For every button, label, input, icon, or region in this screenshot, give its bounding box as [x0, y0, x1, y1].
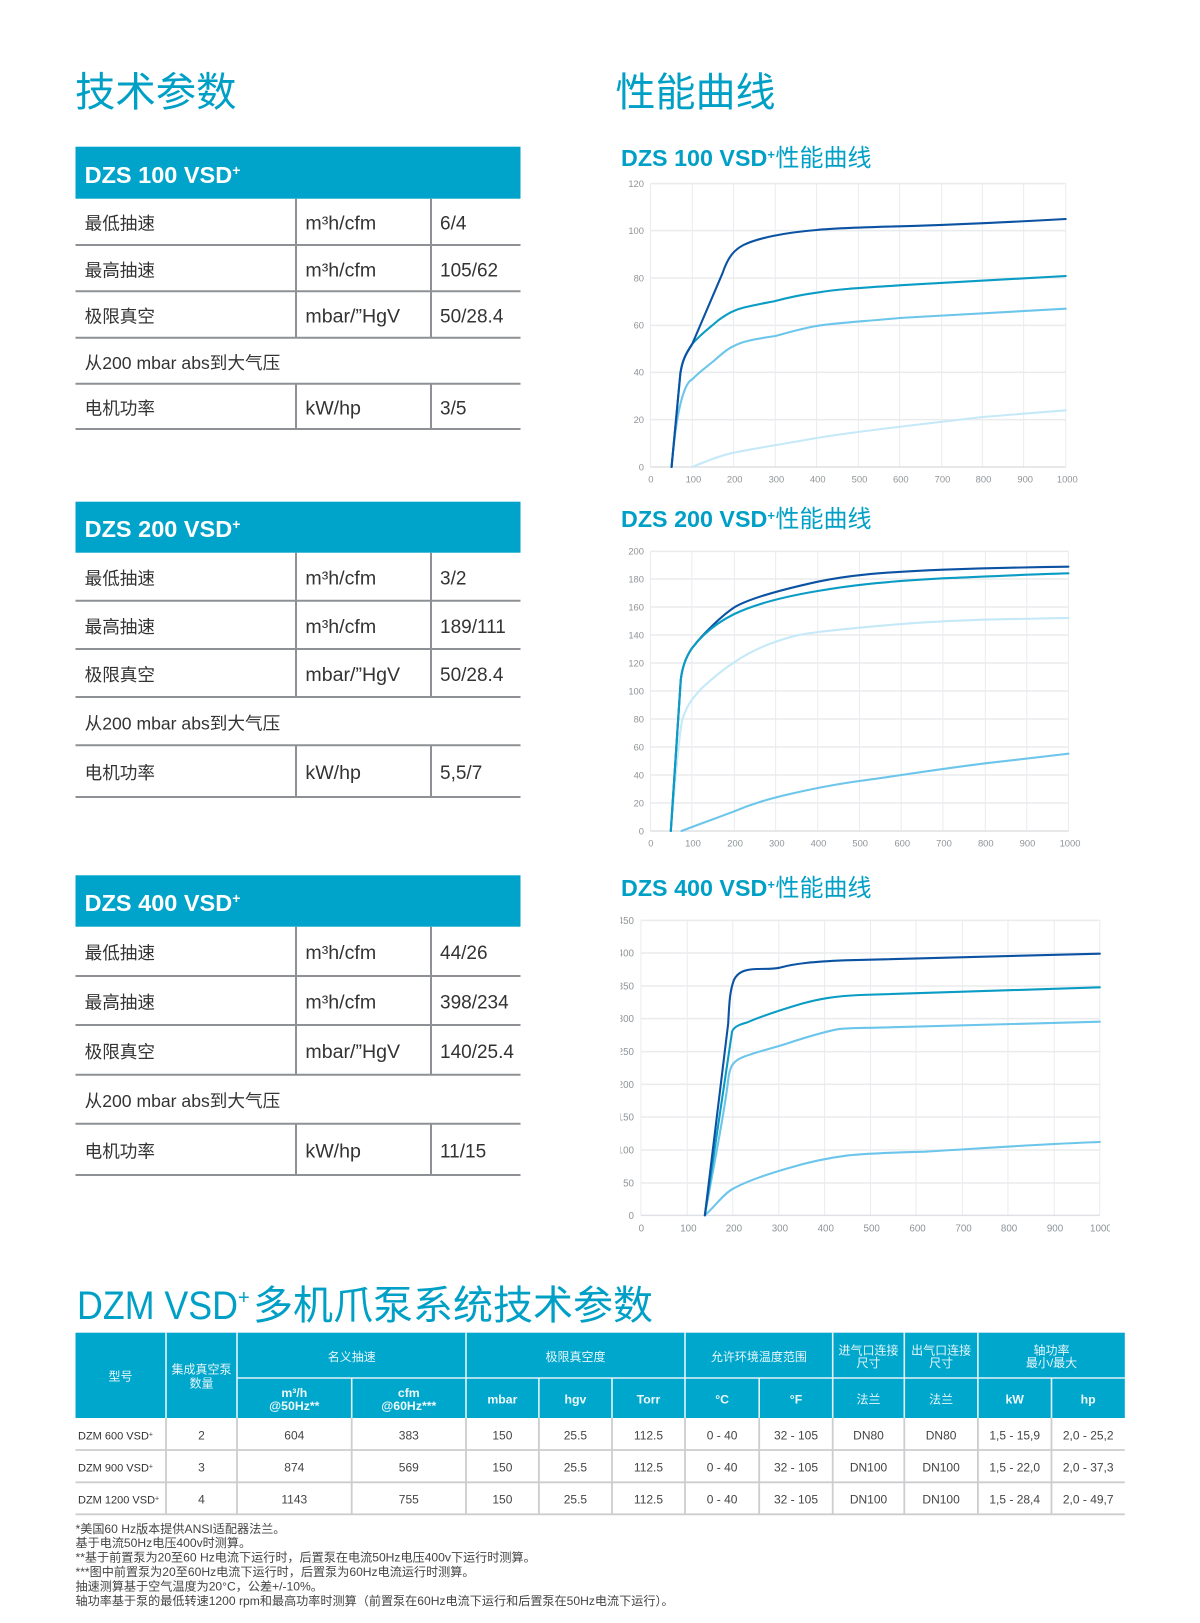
table row: DZM 1200 VSD+: +: [155, 1496, 159, 1502]
title: DZM VSD+ multi-claw pump system parameters: 多机爪泵系统技术参数: [253, 1284, 653, 1328]
table header labels: first row: 轴功率: [1033, 1342, 1070, 1358]
table header labels: first row: 集成真空泵: [171, 1362, 232, 1376]
x axis labels: 700: [935, 474, 950, 484]
spec rows: mbar/”HgV: [305, 306, 400, 328]
table header labels: first row: 进气口连接: [838, 1342, 899, 1358]
table header labels: second row: 法兰: [929, 1392, 953, 1406]
x axis labels: 500: [852, 838, 868, 848]
table row: DZM 600 VSD+: DZM 600 VSD: [78, 1430, 149, 1442]
chart: DZS 200 VSD+ performance curves: [628, 546, 1080, 848]
y axis labels: 250: [618, 1047, 635, 1058]
heading: DZS 400 VSD+ curve: +: [767, 877, 775, 892]
table header: DZS 100 VSD+: +: [232, 162, 240, 178]
spec rows: m³h/cfm: [305, 616, 376, 638]
spec rows: kW/hp: [305, 762, 361, 784]
table row: DZM 900 VSD+: 1,5 - 22,0: [989, 1460, 1040, 1474]
spec rows: 6/4: [440, 214, 467, 234]
table row: DZM 900 VSD+: DZM 900 VSD: [78, 1462, 149, 1474]
table row: DZM 600 VSD+: 32 - 105: [774, 1428, 818, 1442]
title: technical parameters: 技术参数: [75, 69, 237, 115]
table header: DZS 200 VSD+: DZS 200 VSD: [85, 516, 232, 542]
table row: DZM 1200 VSD+: DN100: [850, 1493, 888, 1507]
table header background: [76, 1333, 1125, 1418]
title: DZM VSD+ multi-claw pump system parameters: [77, 1284, 653, 1328]
x axis labels: 1000: [1057, 474, 1078, 484]
x axis labels: 600: [909, 1224, 926, 1234]
y axis labels: 80: [634, 713, 644, 724]
y axis labels: 100: [628, 685, 644, 696]
spec rows: mbar/”HgV: [305, 1041, 400, 1063]
curve: light blue: [705, 1022, 1100, 1215]
table row: DZM 900 VSD+: 874: [284, 1460, 305, 1474]
curve: dark blue: [705, 954, 1100, 1215]
table header: DZS 400 VSD+: +: [232, 890, 240, 906]
spec rows: 44/26: [440, 943, 488, 964]
table header: DZS 400 VSD+: [76, 875, 520, 927]
spec rows: 50/28.4: [440, 306, 504, 328]
x axis labels: 200: [727, 474, 743, 484]
y axis labels: 20: [634, 797, 644, 808]
x axis labels: 500: [864, 1224, 880, 1234]
y axis labels: 0: [629, 1211, 635, 1222]
heading: DZS 200 VSD+ curve: 性能曲线: [776, 506, 872, 533]
table row: DZM 600 VSD+: DN80: [926, 1428, 957, 1442]
x axis labels: 600: [894, 838, 910, 848]
table header labels: second row: °C: [715, 1392, 729, 1406]
table row: DZM 1200 VSD+: 0 - 40: [707, 1493, 738, 1507]
x axis labels: 900: [1047, 1224, 1064, 1234]
table row: DZM 1200 VSD+: 112.5: [634, 1493, 663, 1507]
spec rows: mbar/”HgV: [305, 664, 400, 686]
spec rows: 3/2: [440, 568, 466, 590]
x axis labels: 900: [1020, 838, 1035, 848]
y axis labels: 200: [618, 1080, 635, 1091]
spec rows: 最高抽速: [85, 617, 155, 637]
table row: DZM 1200 VSD+: 4: [198, 1493, 205, 1507]
spec rows: 189/111: [440, 617, 506, 638]
curve: teal: [672, 276, 1066, 467]
table row: DZM 900 VSD+: DN100: [850, 1460, 888, 1474]
y axis labels: 180: [628, 573, 644, 584]
spec rows: 3/5: [440, 398, 466, 420]
x axis labels: [639, 1224, 1110, 1232]
x axis labels: 1000: [1090, 1224, 1112, 1234]
y axis labels: 100: [618, 1146, 635, 1156]
table header labels: second row: 法兰: [856, 1392, 881, 1406]
curve: dark blue: [671, 567, 1068, 831]
title: DZM VSD+ multi-claw pump system parameters: +: [238, 1287, 250, 1309]
table row: DZM 900 VSD+: 0 - 40: [707, 1460, 738, 1474]
spec rows: 50/28.4: [440, 665, 504, 686]
spec rows: m³h/cfm: [305, 260, 376, 282]
x axis labels: 0: [648, 474, 654, 484]
x axis labels: 800: [1001, 1224, 1018, 1234]
chart: DZS 400 VSD+ performance curves: [618, 916, 1112, 1234]
x axis labels: [648, 474, 1078, 484]
y axis labels: 60: [634, 320, 644, 331]
y axis labels: 80: [634, 272, 644, 283]
x axis labels: 0: [648, 838, 654, 848]
table row: DZM 1200 VSD+: 2,0 - 49,7: [1063, 1493, 1114, 1507]
table row: DZM 600 VSD+: 1,5 - 15,9: [989, 1428, 1040, 1442]
x axis labels: 400: [818, 1224, 835, 1234]
table row: DZM 600 VSD+: 112.5: [634, 1428, 663, 1442]
table header labels: first row: 出气口连接: [911, 1342, 971, 1358]
table header labels: second row: @60Hz***: [381, 1399, 437, 1413]
curve: light blue: [672, 309, 1066, 467]
spec rows: 从200 mbar abs到大气压: [85, 353, 280, 373]
table row: DZM 900 VSD+: 3: [198, 1460, 205, 1474]
curve: dark blue: [672, 219, 1066, 467]
curve: lowest pale: [692, 410, 1066, 467]
table header labels: first row: 极限真空度: [545, 1349, 606, 1364]
heading: DZS 100 VSD+ curve: 性能曲线: [776, 145, 872, 172]
table row: DZM 600 VSD+: 25.5: [564, 1428, 587, 1442]
title: performance curves: 性能曲线: [616, 71, 776, 115]
table row: DZM 1200 VSD+: DZM 1200 VSD: [78, 1494, 155, 1506]
y axis labels: 400: [618, 948, 635, 960]
curve: teal: [671, 573, 1068, 831]
table header: DZS 200 VSD+: [76, 502, 520, 553]
spec rows: 398/234: [440, 992, 509, 1014]
table header labels: first row: 尺寸: [929, 1356, 953, 1370]
table header labels: second row: hp: [1081, 1392, 1096, 1406]
spec rows: 105/62: [440, 260, 498, 282]
table header labels: first row: 最小/最大: [1026, 1356, 1077, 1370]
x axis labels: 300: [769, 474, 784, 484]
table row: DZM 900 VSD+: DN100: [922, 1460, 960, 1474]
footnotes: ***图中前置泵为20至60Hz电流下运行时，后置泵为60Hz电流运行时测算。: [76, 1564, 474, 1579]
table header labels: first row: [108, 1342, 1077, 1390]
y axis labels: 150: [618, 1112, 635, 1124]
y axis labels: 50: [623, 1178, 635, 1190]
spec rows: kW/hp: [305, 398, 361, 420]
panel: DZM VSD+ system spec table: [76, 1333, 1125, 1514]
x axis labels: 700: [936, 838, 952, 848]
spec rows: 5,5/7: [440, 763, 482, 784]
y axis labels: [620, 917, 634, 1219]
table row: DZM 600 VSD+: 2,0 - 25,2: [1063, 1428, 1114, 1442]
x axis labels: 200: [726, 1224, 743, 1234]
table header: DZS 100 VSD+: DZS 100 VSD: [85, 162, 232, 188]
x axis labels: 800: [976, 474, 991, 484]
spec rows: 最低抽速: [85, 568, 155, 588]
x axis labels: 200: [727, 838, 743, 848]
table row: DZM 600 VSD+: 2: [198, 1428, 205, 1442]
panel: DZS 400 VSD+ spec table: [76, 875, 520, 1175]
spec rows: 最低抽速: [85, 214, 155, 234]
curve: light blue: [682, 754, 1068, 831]
x axis labels: 300: [769, 838, 785, 848]
table row: DZM 600 VSD+: 0 - 40: [707, 1428, 738, 1442]
table row: DZM 900 VSD+: 569: [399, 1460, 419, 1474]
table header labels: second row: @50Hz**: [269, 1399, 320, 1413]
y axis labels: 300: [618, 1014, 635, 1025]
heading: DZS 200 VSD+ curve: DZS 200 VSD: [621, 506, 767, 532]
x axis labels: 100: [686, 474, 701, 484]
table row: DZM 1200 VSD+: 32 - 105: [774, 1493, 818, 1507]
spec rows: 极限真空: [85, 1042, 155, 1062]
y axis labels: 0: [639, 825, 644, 836]
table header labels: second row: cfm: [398, 1386, 420, 1400]
heading: DZS 100 VSD+ curve: +: [767, 147, 775, 162]
spec rows: m³h/cfm: [305, 992, 376, 1014]
curve: pale: [671, 618, 1068, 831]
x axis labels: 100: [685, 838, 701, 848]
table header labels: second row: Torr: [637, 1392, 661, 1406]
table row: DZM 600 VSD+: [78, 1428, 1114, 1442]
x axis labels: 400: [810, 474, 826, 484]
footnotes: [76, 1521, 674, 1608]
y axis labels: 120: [628, 178, 644, 189]
x axis labels: 1000: [1060, 838, 1080, 848]
table row: DZM 1200 VSD+: DN100: [922, 1493, 960, 1507]
spec rows: 最高抽速: [85, 260, 155, 280]
table row: DZM 1200 VSD+: 1,5 - 28,4: [989, 1493, 1040, 1507]
y axis labels: 0: [639, 461, 644, 472]
spec rows: 最高抽速: [85, 992, 155, 1012]
x axis labels: 0: [639, 1224, 645, 1234]
table header labels: second row: kW: [1005, 1392, 1024, 1406]
table header: DZS 100 VSD+: [76, 147, 520, 199]
y axis labels: 200: [628, 546, 644, 557]
y axis labels: [628, 546, 644, 836]
table header labels: second row: m³/h: [281, 1386, 307, 1400]
x axis labels: 700: [955, 1224, 972, 1234]
panel: DZS 100 VSD+ spec table: [76, 147, 520, 429]
table header labels: first row: 允许环境温度范围: [711, 1349, 807, 1364]
footnotes: *美国60 Hz版本提供ANSI适配器法兰。: [76, 1521, 285, 1536]
y axis labels: 40: [634, 769, 644, 780]
y axis labels: 60: [634, 741, 644, 752]
spec rows: 极限真空: [85, 665, 155, 685]
y axis labels: 120: [628, 657, 644, 668]
table row: DZM 1200 VSD+: 25.5: [564, 1493, 587, 1507]
spec rows: 最低抽速: [85, 943, 155, 963]
heading: DZS 400 VSD+ curve: 性能曲线: [776, 875, 872, 902]
y axis labels: 350: [618, 982, 635, 992]
table row: DZM 900 VSD+: 32 - 105: [774, 1460, 818, 1474]
table row: DZM 1200 VSD+: 150: [492, 1493, 513, 1507]
spec rows: 11/15: [440, 1142, 486, 1162]
spec rows: 从200 mbar abs到大气压: [85, 1091, 280, 1111]
heading: DZS 400 VSD+ curve: DZS 400 VSD: [621, 875, 767, 901]
table row: DZM 900 VSD+: 2,0 - 37,3: [1063, 1460, 1114, 1474]
table row: DZM 600 VSD+: 604: [284, 1428, 305, 1442]
table header labels: second row: mbar: [487, 1392, 518, 1406]
table header labels: second row: hgv: [564, 1392, 586, 1406]
table row: DZM 600 VSD+: DN80: [853, 1428, 884, 1442]
table row: DZM 1200 VSD+: [78, 1493, 1114, 1507]
spec rows: 电机功率: [85, 1142, 155, 1162]
spec rows: m³h/cfm: [305, 212, 376, 234]
table row: DZM 900 VSD+: 150: [492, 1460, 513, 1474]
panel: DZS 200 VSD+ spec table: [76, 502, 520, 797]
table row: DZM 900 VSD+: +: [149, 1463, 153, 1470]
spec rows: m³h/cfm: [305, 568, 376, 590]
table row: DZM 1200 VSD+: 755: [399, 1493, 419, 1507]
table header: DZS 200 VSD+: +: [232, 516, 240, 532]
table header labels: first row: 型号: [108, 1370, 133, 1384]
y axis labels: 160: [628, 601, 644, 612]
spec rows: [85, 212, 504, 420]
chart: DZS 100 VSD+ performance curves: [628, 178, 1078, 484]
y axis labels: [628, 178, 644, 472]
spec rows: 电机功率: [85, 763, 155, 783]
spec rows: 电机功率: [85, 398, 155, 418]
title: DZM VSD+ multi-claw pump system parameters: DZM VSD: [77, 1284, 238, 1328]
y axis labels: 100: [628, 225, 644, 236]
x axis labels: 500: [852, 474, 867, 484]
table header labels: first row: 名义抽速: [328, 1349, 376, 1364]
curve: light blue low: [705, 1142, 1100, 1215]
heading: DZS 100 VSD+ curve: DZS 100 VSD: [621, 145, 767, 171]
table row: DZM 900 VSD+: 112.5: [634, 1460, 663, 1474]
table header labels: second row: °F: [790, 1392, 803, 1406]
footnotes: **基于前置泵为20至60 Hz电流下运行时，后置泵在电流50Hz电压400v下运行时测算。: [76, 1550, 536, 1564]
curve: teal: [705, 987, 1100, 1215]
y axis labels: 20: [634, 414, 644, 425]
table row: DZM 1200 VSD+: 1143: [281, 1493, 308, 1507]
spec rows: [85, 942, 514, 1162]
x axis labels: [648, 838, 1080, 848]
x axis labels: 800: [978, 838, 994, 848]
table row: DZM 600 VSD+: +: [149, 1431, 153, 1438]
footnotes: 抽速测算基于空气温度为20°C，公差+/-10%。: [76, 1578, 323, 1594]
spec rows: 从200 mbar abs到大气压: [85, 714, 280, 734]
spec rows: m³h/cfm: [305, 942, 376, 964]
table header: DZS 400 VSD+: DZS 400 VSD: [85, 890, 232, 916]
table header labels: second row: [269, 1386, 1096, 1413]
spec rows: 极限真空: [85, 306, 155, 326]
spec rows: 140/25.4: [440, 1042, 514, 1063]
x axis labels: 400: [811, 838, 826, 848]
x axis labels: 600: [893, 474, 909, 484]
y axis labels: 140: [628, 629, 644, 640]
x axis labels: 300: [772, 1224, 789, 1234]
footnotes: 轴功率基于泵的最低转速1200 rpm和最高功率时测算（前置泵在60Hz电流下运行和后置泵在50Hz电流下运行）。: [76, 1593, 674, 1608]
x axis labels: 900: [1017, 474, 1033, 484]
table row: DZM 900 VSD+: [78, 1460, 1114, 1474]
y axis labels: 40: [634, 367, 644, 378]
footnotes: 基于电流50Hz电压400v时测算。: [76, 1535, 251, 1550]
table header labels: first row: 尺寸: [856, 1356, 881, 1370]
table row: DZM 900 VSD+: 25.5: [564, 1460, 587, 1474]
table row: DZM 600 VSD+: 383: [399, 1428, 419, 1442]
heading: DZS 200 VSD+ curve: +: [767, 508, 775, 523]
spec rows: kW/hp: [305, 1140, 361, 1162]
x axis labels: 100: [680, 1224, 697, 1234]
table header labels: first row: 数量: [189, 1376, 214, 1390]
table row: DZM 600 VSD+: 150: [492, 1428, 513, 1442]
y axis labels: 450: [618, 916, 635, 927]
spec rows: [85, 568, 506, 784]
